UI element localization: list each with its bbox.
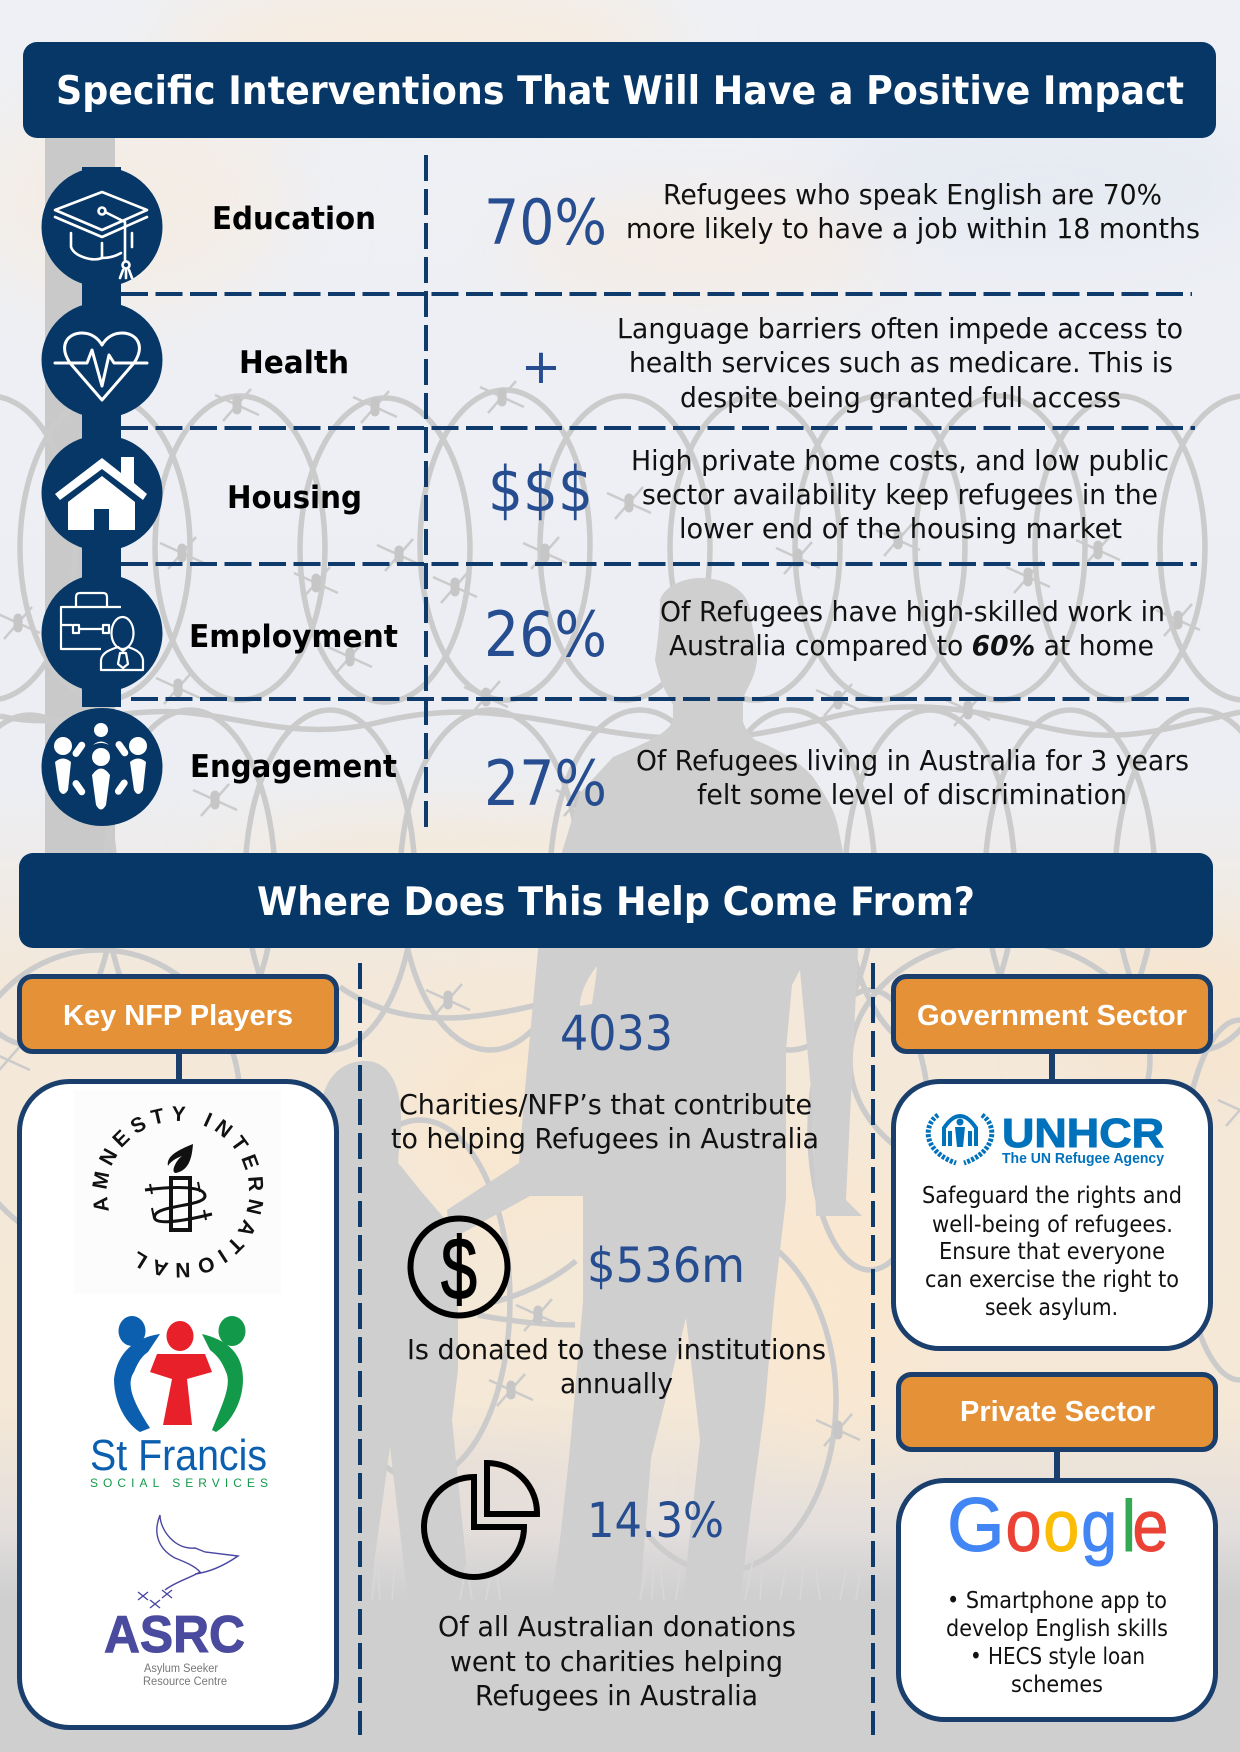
description: • Smartphone app to	[947, 1588, 1167, 1614]
small sky slit	[580, 966, 597, 1006]
fence post	[45, 138, 115, 858]
description	[631, 444, 1169, 545]
orange heading	[898, 1374, 1216, 1450]
logo: Amnesty International: AMNESTY INTERNATIONAL	[92, 1106, 264, 1278]
description: • HECS style loan	[970, 1644, 1145, 1670]
row: housing	[227, 444, 1169, 545]
stat: $536m donated	[407, 1238, 826, 1400]
description	[626, 178, 1200, 245]
stat: 14.3% of donations: Of all Australian donations	[438, 1610, 796, 1643]
stat: 4033 charities: to helping Refugees in Australia	[391, 1122, 819, 1155]
row: health	[239, 312, 1183, 414]
description	[660, 595, 1165, 662]
stat: 26%	[484, 598, 607, 671]
stat: 70%	[484, 186, 607, 259]
description: Australia compared to 60% at home	[669, 629, 1154, 662]
row: engagement	[190, 744, 1189, 820]
description	[617, 312, 1183, 414]
panel: private sector	[898, 1374, 1216, 1720]
table grid: dashed dividers	[121, 155, 1197, 833]
description: Safeguard the rights and	[922, 1183, 1182, 1209]
panel: government sector	[894, 976, 1210, 1348]
logo: Asylum Seeker Resource Centre: ASRC	[104, 1606, 245, 1664]
logo: UNHCR	[928, 1110, 1164, 1167]
description: High private home costs, and low public	[631, 444, 1169, 477]
logo: Google: G	[947, 1484, 1005, 1568]
heading: Specific Interventions That Will Have a Positive Impact	[56, 69, 1184, 114]
description: develop English skills	[946, 1616, 1168, 1642]
icon: group of people	[54, 723, 147, 810]
barbed wire coils	[0, 390, 1240, 1572]
icon: graduation cap	[55, 192, 147, 278]
stat: $$$	[488, 453, 593, 526]
description: lower end of the housing market	[679, 512, 1122, 545]
stat: 14.3% of donations	[438, 1493, 796, 1712]
panel: key NFP players	[17, 974, 339, 1730]
icon: dollar coin	[410, 1218, 508, 1318]
logo: St Francis Social Services: St Francis	[90, 1431, 267, 1480]
ground	[0, 1600, 1240, 1752]
connector	[1054, 1449, 1060, 1481]
logo: Google: g	[1081, 1486, 1117, 1567]
logo: UNHCR: UNHCR	[1002, 1110, 1164, 1156]
description	[946, 1588, 1168, 1698]
label: Engagement	[190, 749, 397, 785]
panel: central statistics	[391, 1006, 826, 1712]
icon column: navy circle chain	[42, 167, 162, 826]
logo: Google	[947, 1484, 1168, 1568]
silhouette: child figure	[300, 1061, 470, 1600]
orange heading: Government Sector	[917, 1000, 1187, 1032]
icon: heart with pulse	[55, 333, 147, 400]
orange heading	[20, 976, 336, 1052]
description: more likely to have a job within 18 months	[626, 212, 1200, 245]
description: Language barriers often impede access to	[617, 312, 1183, 345]
icon: dollar coin: $	[441, 1219, 477, 1318]
wire barb knots	[18, 392, 1178, 1435]
label: Health	[239, 345, 349, 381]
description	[636, 744, 1189, 811]
logo: St Francis Social Services: SOCIAL SERVICES	[90, 1476, 268, 1490]
description: Of Refugees have high-skilled work in	[660, 595, 1165, 628]
connector	[1049, 1052, 1055, 1082]
logo: Google: o	[1006, 1486, 1042, 1567]
orange heading	[894, 976, 1210, 1052]
stat: 4033 charities: Charities/NFP’s that contribute	[399, 1088, 812, 1121]
description: seek asylum.	[985, 1295, 1118, 1321]
stat: 27%	[484, 747, 607, 820]
icon: pie chart	[424, 1463, 537, 1577]
silhouette: adult figure	[447, 578, 862, 1600]
description: can exercise the right to	[925, 1267, 1179, 1293]
row: employment	[189, 595, 1165, 671]
stat: 14.3% of donations: Refugees in Australia	[475, 1679, 758, 1712]
logo: Asylum Seeker Resource Centre	[104, 1515, 245, 1688]
logo: Google: o	[1043, 1486, 1079, 1567]
logo: Google: l	[1122, 1486, 1136, 1567]
banner: where does this help come from	[19, 853, 1213, 948]
description: health services such as medicare. This is	[629, 346, 1173, 379]
logo: Asylum Seeker Resource Centre: Asylum Seeker	[144, 1663, 218, 1675]
white card	[894, 1082, 1210, 1348]
stat: $536m donated: $536m	[587, 1238, 745, 1294]
description: Of Refugees living in Australia for 3 years	[636, 744, 1189, 777]
logo: UNHCR: The UN Refugee Agency	[1002, 1151, 1164, 1167]
icon: briefcase and person	[61, 593, 143, 670]
orange heading: Private Sector	[960, 1396, 1155, 1428]
row: education	[212, 178, 1200, 259]
icon: house	[55, 457, 147, 530]
label: Employment	[189, 619, 398, 655]
description: sector availability keep refugees in the	[642, 478, 1158, 511]
logo: St Francis Social Services	[90, 1316, 268, 1490]
white logo card	[20, 1082, 336, 1728]
orange heading: Key NFP Players	[63, 1000, 293, 1032]
label: Education	[212, 201, 376, 237]
stat: 4033 charities	[391, 1006, 819, 1155]
stat: $536m donated: Is donated to these institutions	[407, 1333, 826, 1366]
description	[922, 1183, 1182, 1321]
wire barb spikes	[0, 381, 1240, 1446]
description: Ensure that everyone	[939, 1239, 1165, 1265]
stat: $536m donated: annually	[560, 1367, 673, 1400]
description: felt some level of discrimination	[697, 778, 1127, 811]
section dividers	[360, 963, 873, 1735]
banner: specific interventions	[23, 42, 1216, 138]
logo: Asylum Seeker Resource Centre: Resource Centre	[143, 1676, 227, 1688]
grass blades	[372, 1556, 860, 1600]
connector	[176, 1052, 182, 1082]
stat: +	[521, 339, 561, 395]
ground fade	[0, 1530, 1240, 1600]
heading: Where Does This Help Come From?	[257, 880, 975, 925]
label: Housing	[227, 480, 362, 516]
description: Refugees who speak English are 70%	[663, 178, 1162, 211]
stat: 14.3% of donations: 14.3%	[587, 1493, 724, 1549]
stat: 14.3% of donations: went to charities helping	[450, 1645, 783, 1678]
description: schemes	[1011, 1672, 1103, 1698]
description: well-being of refugees.	[932, 1212, 1173, 1238]
stat: 4033 charities: 4033	[560, 1006, 673, 1062]
white card	[898, 1480, 1216, 1720]
logo: Google: e	[1132, 1486, 1168, 1567]
description: despite being granted full access	[680, 381, 1121, 414]
